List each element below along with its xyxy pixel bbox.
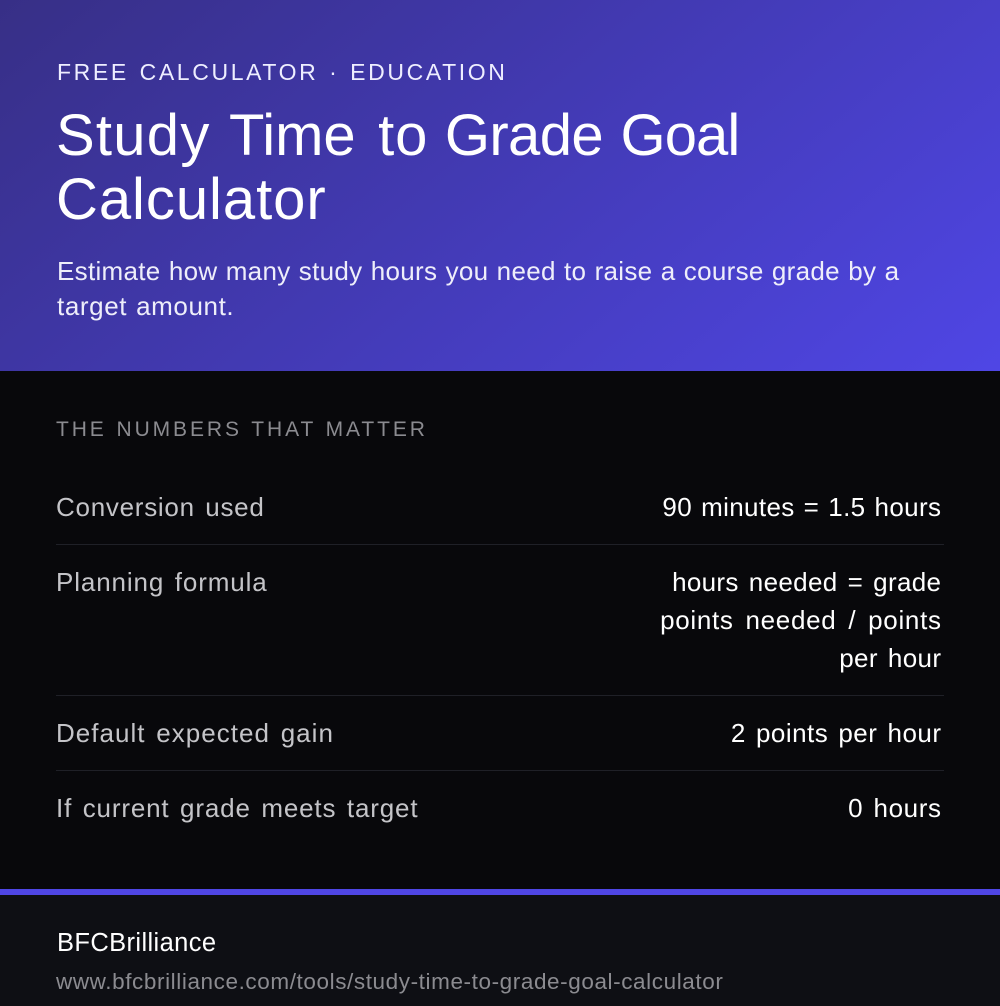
title: Calculator [56,167,327,232]
row value: 0 hours [848,793,942,823]
row: planning formula [56,567,942,673]
row: conversion used [56,492,941,522]
row value: per hour [839,643,941,673]
row label: Conversion used [56,492,265,522]
row label: Default expected gain [56,718,334,748]
subtitle [57,256,900,321]
row label: Planning formula [56,567,268,597]
brand name: BFCBrilliance [57,929,216,957]
url: www.bfcbrilliance.com/tools/study-time-to-grade-goal-calculator [56,969,723,994]
eyebrow label: FREE CALCULATOR · EDUCATION [57,59,508,85]
title: Study Time to Grade Goal [56,103,739,168]
row value: 2 points per hour [731,718,941,748]
section heading: THE NUMBERS THAT MATTER [56,418,428,441]
subtitle: target amount. [57,291,234,321]
row value [660,567,942,673]
row value: points needed / points [660,605,942,635]
row: current grade meets target [56,793,942,823]
subtitle: Estimate how many study hours you need to raise a course grade by a [57,256,899,286]
row: default expected gain [56,718,941,748]
row value: 90 minutes = 1.5 hours [662,492,941,522]
row value: hours needed = grade [672,567,941,597]
title [56,103,739,232]
row label: If current grade meets target [56,793,418,823]
header panel [0,0,1000,371]
footer panel [0,889,1000,1006]
